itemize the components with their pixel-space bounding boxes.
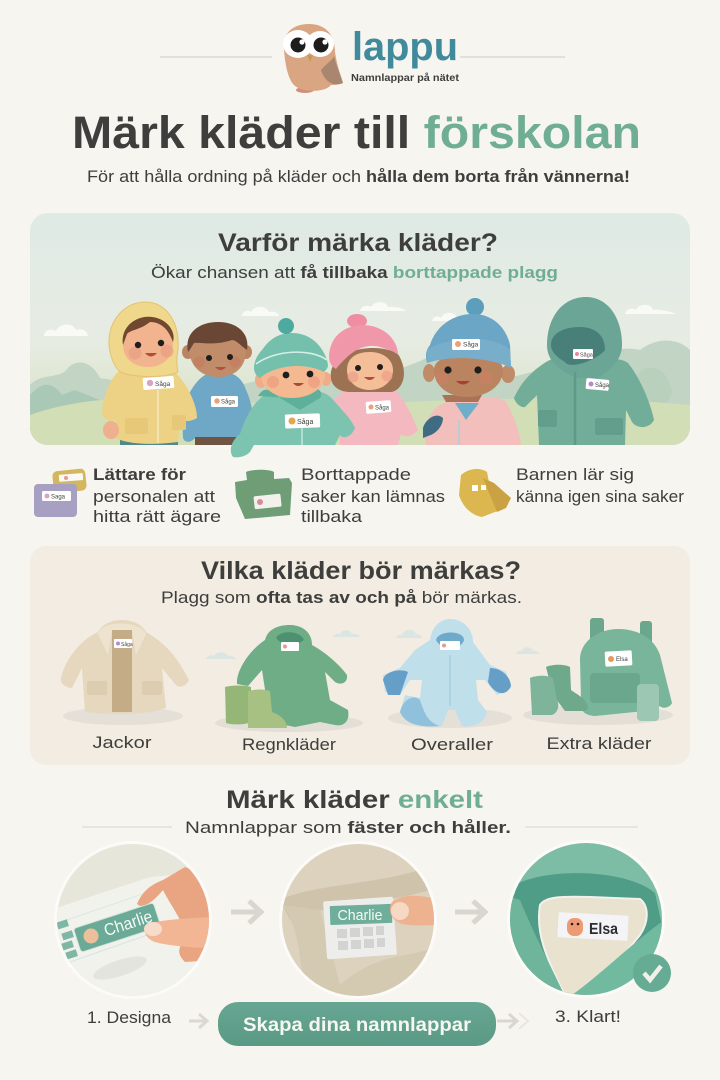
label: extra clothes: Extra kläder bbox=[546, 735, 652, 753]
heading: which clothes: Vilka kläder bör märkas? bbox=[201, 557, 521, 585]
text: easier for staff: Lättare för bbox=[93, 466, 187, 484]
arrow: to button bbox=[189, 1014, 207, 1028]
panel: which clothes bbox=[30, 546, 690, 765]
child: teal jacket: Såga bbox=[297, 418, 313, 426]
item: jackets bbox=[61, 620, 189, 752]
button: create name labels bbox=[218, 1002, 496, 1046]
benefit: lost items returned: tillbaka bbox=[301, 508, 363, 526]
arrow: step 2 to 3 bbox=[455, 901, 485, 923]
arrow: step 1 to 2 bbox=[231, 901, 261, 923]
label: jackets: Jackor bbox=[92, 734, 152, 752]
benefit: easier for staff: hitta rätt ägare bbox=[93, 508, 221, 526]
item: extra clothes bbox=[523, 618, 673, 753]
child: pink hat bbox=[329, 314, 418, 445]
text: children recognise their things: Barnen lär sig bbox=[516, 466, 634, 484]
child: blue hat bbox=[423, 298, 521, 445]
heading: why: Varför märka kläder? bbox=[218, 229, 498, 257]
child: blue hat: Såga bbox=[463, 340, 479, 348]
title: Märk kläder till förskolan bbox=[72, 107, 641, 158]
benefit: children recognise their things: känna igen sina saker bbox=[516, 488, 685, 506]
benefit: easier for staff: personalen att bbox=[93, 488, 215, 506]
child: blue jacket bbox=[182, 322, 254, 446]
landscape background bbox=[30, 302, 690, 445]
label: overalls: Overaller bbox=[411, 736, 494, 754]
step 1: design: Charlie bbox=[101, 907, 155, 940]
child: yellow raincoat: Såga bbox=[155, 380, 171, 388]
icon: owl bbox=[283, 24, 343, 93]
subtitle: För att hålla ordning på kläder och hålla dem borta från vännerna! bbox=[87, 168, 630, 186]
step 2: apply bbox=[282, 844, 434, 996]
logo wordmark: lappu bbox=[352, 25, 458, 69]
item: jackets: Såga bbox=[121, 641, 133, 648]
benefit: children recognise their things bbox=[459, 466, 685, 517]
jacket: green hooded: Såga bbox=[595, 382, 610, 389]
child: teal jacket bbox=[231, 318, 355, 457]
benefit: lost items returned: saker kan lämnas bbox=[301, 488, 445, 506]
child: pink hat: Såga bbox=[375, 404, 390, 412]
arrow: from button bbox=[497, 1013, 528, 1029]
text: lost items returned: Borttappade bbox=[301, 466, 411, 484]
benefit: lost items returned bbox=[235, 466, 445, 526]
icon: yellow boots bbox=[459, 469, 511, 517]
heading: label easily: Märk kläder enkelt bbox=[226, 786, 484, 814]
label: rainwear: Regnkläder bbox=[242, 736, 337, 754]
jacket: green hooded bbox=[514, 297, 654, 445]
item: overalls bbox=[383, 619, 512, 754]
illustration: children bbox=[102, 297, 654, 446]
benefit: easier for staff bbox=[34, 466, 221, 526]
header logo bbox=[160, 24, 565, 93]
step 3: done bbox=[505, 840, 671, 1000]
label: step 3: 3. Klart! bbox=[555, 1008, 621, 1026]
step 2: apply: Charlie bbox=[338, 907, 382, 924]
icon: check badge bbox=[633, 954, 671, 992]
step 3: done: Elsa bbox=[589, 921, 618, 938]
panel: why label clothes bbox=[30, 213, 690, 457]
child: blue jacket: Såga bbox=[221, 398, 236, 406]
icon: label boxes: Saga bbox=[51, 494, 66, 500]
logo tagline: Namnlappar på nätet bbox=[351, 72, 460, 84]
subheading: why: Ökar chansen att få tillbaka borttappade plagg bbox=[151, 264, 558, 282]
subheading: which clothes: Plagg som ofta tas av och på bör märkas. bbox=[161, 589, 522, 607]
step 1: design bbox=[57, 844, 209, 980]
button: create name labels: Skapa dina namnlappar bbox=[243, 1015, 472, 1036]
subheading: label easily: Namnlappar som fäster och håller. bbox=[185, 819, 511, 837]
item: extra clothes: Elsa bbox=[616, 657, 628, 663]
jacket: green hooded: Såga bbox=[580, 352, 594, 358]
icon: green box bbox=[235, 470, 292, 519]
icon: label boxes bbox=[34, 468, 87, 517]
child: yellow raincoat bbox=[102, 302, 197, 446]
item: rainwear bbox=[215, 625, 363, 754]
label: step 1: 1. Designa bbox=[87, 1009, 172, 1027]
clouds bbox=[206, 630, 540, 659]
